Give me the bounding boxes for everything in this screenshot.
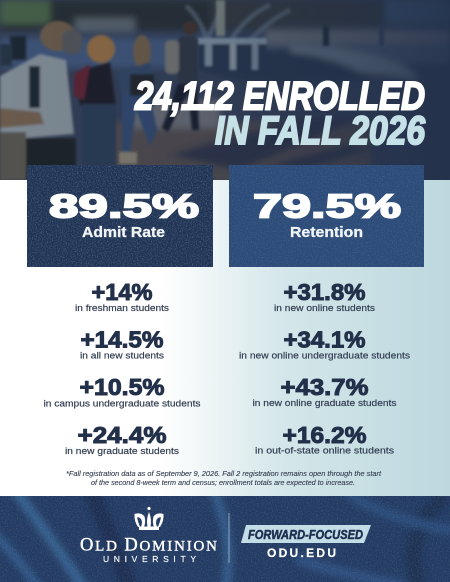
stat: new online: in new online students	[274, 303, 375, 314]
stat: freshman: in freshman students	[75, 303, 169, 314]
stat: new online undergraduate: +34.1%	[284, 326, 366, 352]
stat: new online	[274, 279, 375, 314]
stat: new graduate	[65, 422, 179, 457]
student in grey shirt, foreground	[0, 21, 82, 180]
panel: admit rate	[27, 165, 213, 267]
student walking with backpack	[162, 21, 199, 132]
stats: right column	[239, 279, 410, 456]
website: ODU.EDU	[267, 546, 336, 560]
stats: left column	[44, 279, 201, 457]
stat: campus undergraduate: +10.5%	[80, 374, 165, 400]
stat: new online graduate	[252, 374, 397, 409]
ground shadows	[170, 118, 370, 170]
wordmark: OLD DOMINION	[80, 536, 217, 556]
stat: campus undergraduate	[44, 374, 201, 410]
stat: campus undergraduate: in campus undergraduate students	[44, 398, 201, 410]
student with long blond hair	[118, 35, 157, 164]
icon: crown	[134, 507, 164, 530]
footnote: *Fall registration data as of September 9, 2026. Fall 2 registration remains open through the start	[66, 469, 382, 478]
page background gradient	[0, 170, 450, 500]
divider	[228, 513, 230, 563]
left edge background figures	[0, 36, 26, 66]
stat: all new: +14.5%	[80, 326, 164, 352]
stat: out-of-state online	[255, 422, 394, 456]
stat: new online undergraduate	[239, 326, 410, 362]
stat: new online graduate: +43.7%	[280, 374, 369, 400]
distant pedestrians	[323, 24, 384, 46]
footer band	[0, 490, 450, 582]
stat: freshman	[75, 279, 169, 314]
retention value: 79.5%	[253, 188, 401, 224]
hero photo: students walking past campus fountain	[0, 0, 450, 182]
stat: all new: in all new students	[80, 350, 164, 362]
stat: new online graduate: in new online graduate students	[252, 398, 397, 409]
stat: new online: +31.8%	[284, 279, 366, 305]
tagline banner: FORWARD-FOCUSED	[248, 528, 363, 542]
wordmark subline: UNIVERSITY	[103, 554, 196, 564]
title	[134, 74, 426, 153]
panel: retention	[229, 165, 424, 267]
retention label: Retention	[290, 225, 363, 241]
logo: Old Dominion University	[80, 507, 217, 564]
student with curly hair	[74, 35, 116, 166]
stat: new graduate: in new graduate students	[65, 446, 179, 457]
stat: out-of-state online: +16.2%	[282, 422, 367, 448]
stat: out-of-state online: in out-of-state online students	[255, 446, 394, 456]
admit rate value: 89.5%	[49, 188, 199, 224]
stat: freshman: +14%	[92, 279, 153, 305]
fountain	[186, 0, 290, 70]
admit rate label: Admit Rate	[82, 225, 165, 241]
stat: new online undergraduate: in new online undergraduate students	[239, 350, 410, 362]
footnote	[66, 469, 382, 487]
footnote: of the second 8-week term and census; enrollment totals are expected to increase.	[91, 478, 355, 487]
stat: new graduate: +24.4%	[78, 422, 167, 448]
